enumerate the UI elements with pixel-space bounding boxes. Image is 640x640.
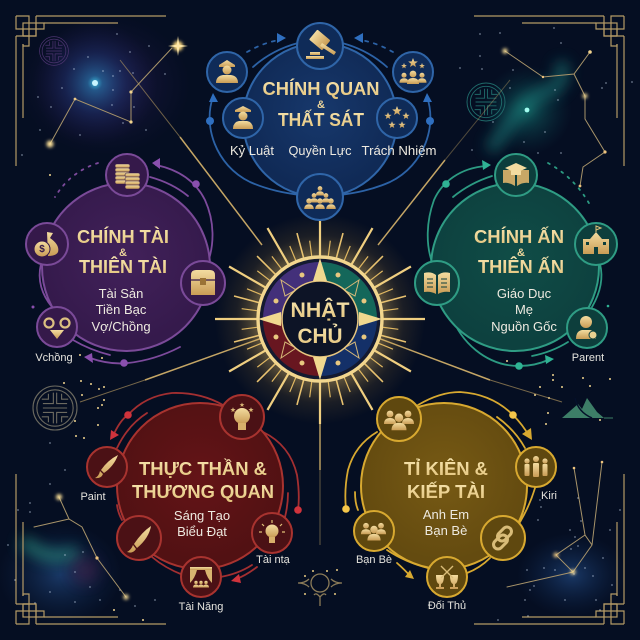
- keyword: Tiền Bạc: Tiền Bạc: [96, 302, 147, 317]
- central sun glow: [215, 214, 425, 424]
- icon: bright idea: [220, 395, 264, 439]
- label: Parent: Parent: [572, 352, 604, 364]
- orbit arcs: [210, 40, 430, 195]
- quadrant: teal: [320, 262, 377, 319]
- heading: Thiên Tài: THIÊN TÀI: [79, 256, 167, 277]
- constellation: bottom left: [34, 494, 129, 600]
- keyword: Biểu Đạt: Biểu Đạt: [177, 524, 227, 539]
- label: Đối Thủ: Đối Thủ: [428, 600, 466, 612]
- main circle: [431, 183, 599, 351]
- keyword: Sáng Tạo: Sáng Tạo: [174, 508, 230, 523]
- keyword: Vợ/Chồng: Vợ/Chồng: [91, 319, 151, 334]
- nebula: top left blue: [20, 15, 190, 155]
- icon: group: [377, 397, 421, 441]
- sunburst rays: [215, 214, 425, 424]
- knot emblem: purple: [40, 37, 68, 65]
- icon: open book: [415, 261, 459, 305]
- label: Paint: Paint: [80, 491, 106, 503]
- keyword: Nguồn Gốc: Nguồn Gốc: [491, 319, 557, 334]
- ampersand: &: [317, 99, 325, 111]
- compass points: [258, 258, 382, 380]
- keyword: Giáo Dục: Giáo Dục: [497, 286, 552, 301]
- heading: Tỉ Kiên &: TỈ KIÊN &: [404, 458, 488, 479]
- icon: officer top left: [207, 52, 247, 92]
- label: Tài ntạ: Tài ntạ: [256, 554, 291, 566]
- orbit markers: [342, 411, 532, 579]
- gold outer ring: [258, 257, 382, 381]
- nebula: top right teal: [482, 62, 572, 155]
- icon: graduation book: [495, 154, 537, 196]
- orbit markers: [206, 33, 434, 125]
- icon: gavel: [297, 23, 343, 69]
- orbit markers: [442, 160, 609, 370]
- icon: treasure chest: [181, 261, 225, 305]
- heading: Thực Thần &: THỰC THẦN &: [139, 458, 267, 479]
- icon: paintbrush small: [87, 447, 127, 487]
- icon: trophies: [427, 557, 467, 597]
- icon: school: [575, 223, 617, 265]
- keyword: Quyền Lực: Quyền Lực: [288, 143, 352, 158]
- icon: team: [516, 447, 556, 487]
- panel: Tỉ Kiên & Kiếp Tài: [342, 392, 557, 612]
- heading: Chính Ấn: CHÍNH ẤN: [474, 226, 564, 247]
- label: Bạn Bè: Bạn Bè: [356, 554, 392, 566]
- heading: NHẬT: NHẬT: [290, 298, 350, 322]
- knot emblem: teal: [467, 83, 505, 121]
- label: Kiri: Kiri: [541, 490, 557, 502]
- orbit markers: [32, 158, 200, 367]
- corner ornament: top left: [16, 16, 166, 166]
- icon: stars and team: [393, 52, 433, 92]
- icon: light bulb: [252, 513, 292, 553]
- ampersand: &: [517, 247, 525, 259]
- icon: coins: [106, 154, 148, 196]
- panel: Chính Ấn & Thiên Ấn: [415, 154, 617, 370]
- keyword: Tài Sản: Tài Sản: [99, 286, 143, 301]
- label: Tài Năng: Tài Năng: [179, 601, 223, 613]
- icon: five stars: [377, 98, 417, 138]
- corner ornament: top right: [474, 16, 624, 166]
- icon: leader and group: [297, 174, 343, 220]
- keyword: Kỷ Luật: Kỷ Luật: [230, 143, 274, 158]
- main circle: [243, 43, 397, 197]
- orbit markers: [110, 411, 302, 583]
- icon: chain link: [481, 516, 525, 560]
- orbit arcs: [345, 392, 535, 577]
- heading: Chính Quan: CHÍNH QUAN: [262, 78, 380, 99]
- central medallion: Nhật Chủ: [258, 257, 382, 381]
- keyword: Mẹ: Mẹ: [515, 302, 533, 317]
- keyword: Trách Nhiệm: Trách Nhiệm: [362, 143, 436, 158]
- heading: Thất Sát: THẤT SÁT: [278, 109, 364, 130]
- icon: paintbrush large: [117, 516, 161, 560]
- label: Vchồng: Vchồng: [35, 352, 73, 364]
- corner ornament: bottom right: [474, 474, 624, 624]
- wheel dots: [276, 275, 364, 363]
- constellation: bottom right: [507, 461, 603, 587]
- heading: Thương Quan: THƯƠNG QUAN: [132, 482, 274, 502]
- icon: small sun glyph: [298, 570, 342, 606]
- main circle: [42, 183, 210, 351]
- panel: Chính Quan & Thất Sát: [206, 23, 436, 220]
- icon: parent: [567, 308, 607, 348]
- quadrant: maroon: [263, 319, 320, 376]
- icon: mountains: [562, 398, 613, 418]
- long rays from centre: [80, 60, 562, 545]
- icon: officer inner left: [223, 98, 263, 138]
- heading: Thiên Ấn: THIÊN ẤN: [478, 256, 564, 277]
- keyword: Bạn Bè: Bạn Bè: [425, 523, 467, 538]
- panel: Chính Tài & Thiên Tài: [26, 154, 225, 367]
- quadrant: navy: [320, 319, 377, 376]
- knot emblem: grey: [33, 386, 77, 430]
- constellation: top right: [502, 48, 607, 187]
- icon: money bag: $: [39, 244, 45, 255]
- corner ornament: bottom left: [16, 474, 166, 624]
- nebula: bottom left aurora: [0, 523, 122, 627]
- constellation: top left: [46, 48, 172, 148]
- icon: money bag: [26, 223, 68, 265]
- orbit arcs: [113, 393, 299, 579]
- orbit arcs: [40, 163, 213, 363]
- icon: four point star: [168, 36, 188, 56]
- nebula: bottom right blue: [517, 533, 627, 617]
- keyword: Anh Em: Anh Em: [423, 507, 469, 522]
- inner disc: [282, 281, 358, 357]
- heading: Kiếp Tài: KIẾP TÀI: [407, 481, 485, 502]
- icon: couple rings: [37, 307, 77, 347]
- heading: Chính Tài: CHÍNH TÀI: [77, 226, 169, 247]
- ampersand: &: [119, 247, 127, 259]
- quadrant: purple: [263, 262, 320, 319]
- main circle: [117, 403, 283, 569]
- icon: stage: [181, 557, 221, 597]
- main circle: [361, 403, 527, 569]
- orbit arcs: [428, 163, 601, 366]
- panel: Thực Thần & Thương Quan: [80, 393, 302, 613]
- wheel diagonal marks: [281, 280, 359, 358]
- icon: friends: [354, 511, 394, 551]
- heading: CHỦ: CHỦ: [298, 324, 342, 348]
